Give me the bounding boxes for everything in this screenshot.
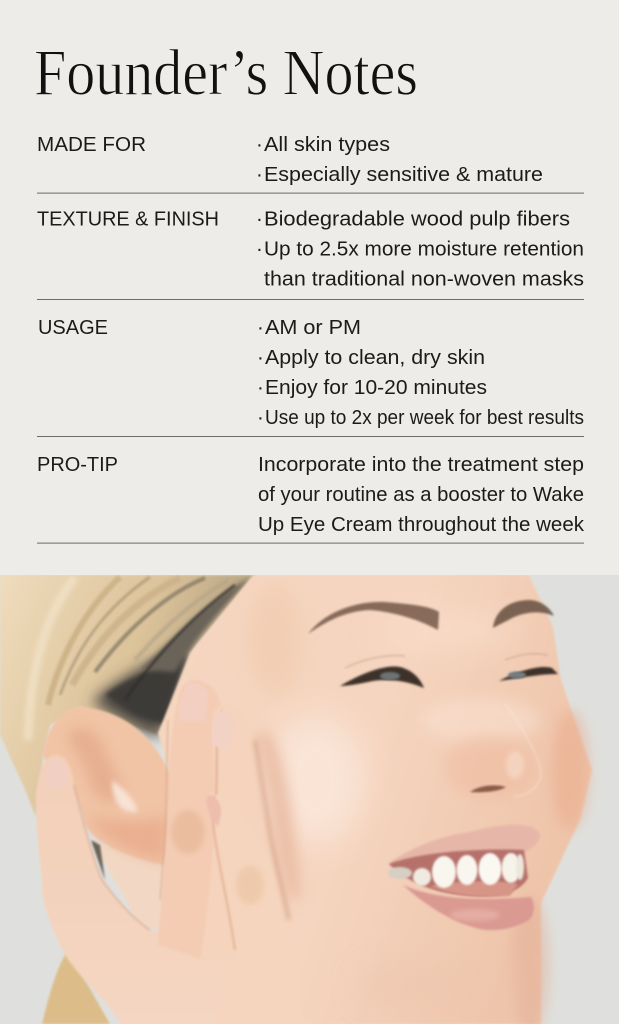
hair: ponytail below hand [42, 950, 110, 1024]
list: usage items: · [257, 316, 264, 339]
mouth interior [389, 850, 528, 896]
list: texture items: · [256, 238, 263, 260]
text: pro-tip body: of your routine as a booster to Wake [258, 483, 584, 506]
panel: founder's notes background [0, 0, 619, 575]
text: pro-tip body: Incorporate into the treatment step [258, 453, 584, 476]
list: made for items: All skin types [264, 133, 390, 156]
title: Founder’s Notes [34, 36, 418, 110]
list: texture items: Up to 2.5x more moisture retention [264, 238, 584, 260]
list: usage items: Enjoy for 10-20 minutes [265, 376, 487, 399]
middle finger [158, 680, 221, 960]
list: usage items: · [257, 376, 264, 399]
list: made for items [256, 133, 543, 186]
list: texture items: · [256, 208, 263, 230]
section: pro-tip [37, 453, 585, 536]
lower lip [403, 885, 534, 930]
hand with four fingers [36, 680, 305, 1024]
list: texture items: Biodegradable wood pulp fibers [264, 208, 570, 230]
list: usage items: AM or PM [265, 316, 361, 339]
list: made for items: · [256, 133, 263, 156]
teeth [388, 853, 524, 888]
label: made for: MADE FOR [37, 133, 146, 156]
section: usage [38, 316, 584, 429]
label: texture and finish: TEXTURE & FINISH [37, 208, 219, 230]
list: texture items: than traditional non-woven masks [264, 268, 584, 290]
index finger [212, 794, 296, 1024]
list: usage items: · [257, 406, 264, 429]
eyes [340, 654, 558, 688]
ring finger [202, 710, 218, 957]
text: pro-tip body: Up Eye Cream throughout the week [258, 513, 585, 536]
list: made for items: Especially sensitive & mature [264, 163, 543, 186]
smile [388, 825, 540, 930]
fingernails [45, 758, 67, 788]
upper lip [389, 825, 540, 866]
list: usage items [257, 316, 584, 429]
hair: blond and dark swept hair [0, 575, 256, 817]
palm and little finger [36, 755, 228, 1024]
label: pro-tip: PRO-TIP [37, 453, 118, 476]
section: made for [37, 133, 543, 186]
list: texture items [256, 208, 584, 290]
list: usage items: · [257, 346, 264, 369]
eyebrows [308, 600, 554, 634]
face [158, 575, 592, 1024]
nose [448, 735, 542, 795]
section: texture and finish [37, 208, 584, 290]
tongue [430, 881, 518, 897]
photo: smiling woman touching her cheek [0, 575, 619, 1024]
ear and neck [43, 707, 172, 930]
list: usage items: Use up to 2x per week for best results [265, 406, 584, 429]
label: usage: USAGE [38, 316, 108, 339]
list: made for items: · [256, 163, 263, 186]
list: usage items: Apply to clean, dry skin [265, 346, 485, 369]
text: pro-tip body [258, 453, 585, 536]
